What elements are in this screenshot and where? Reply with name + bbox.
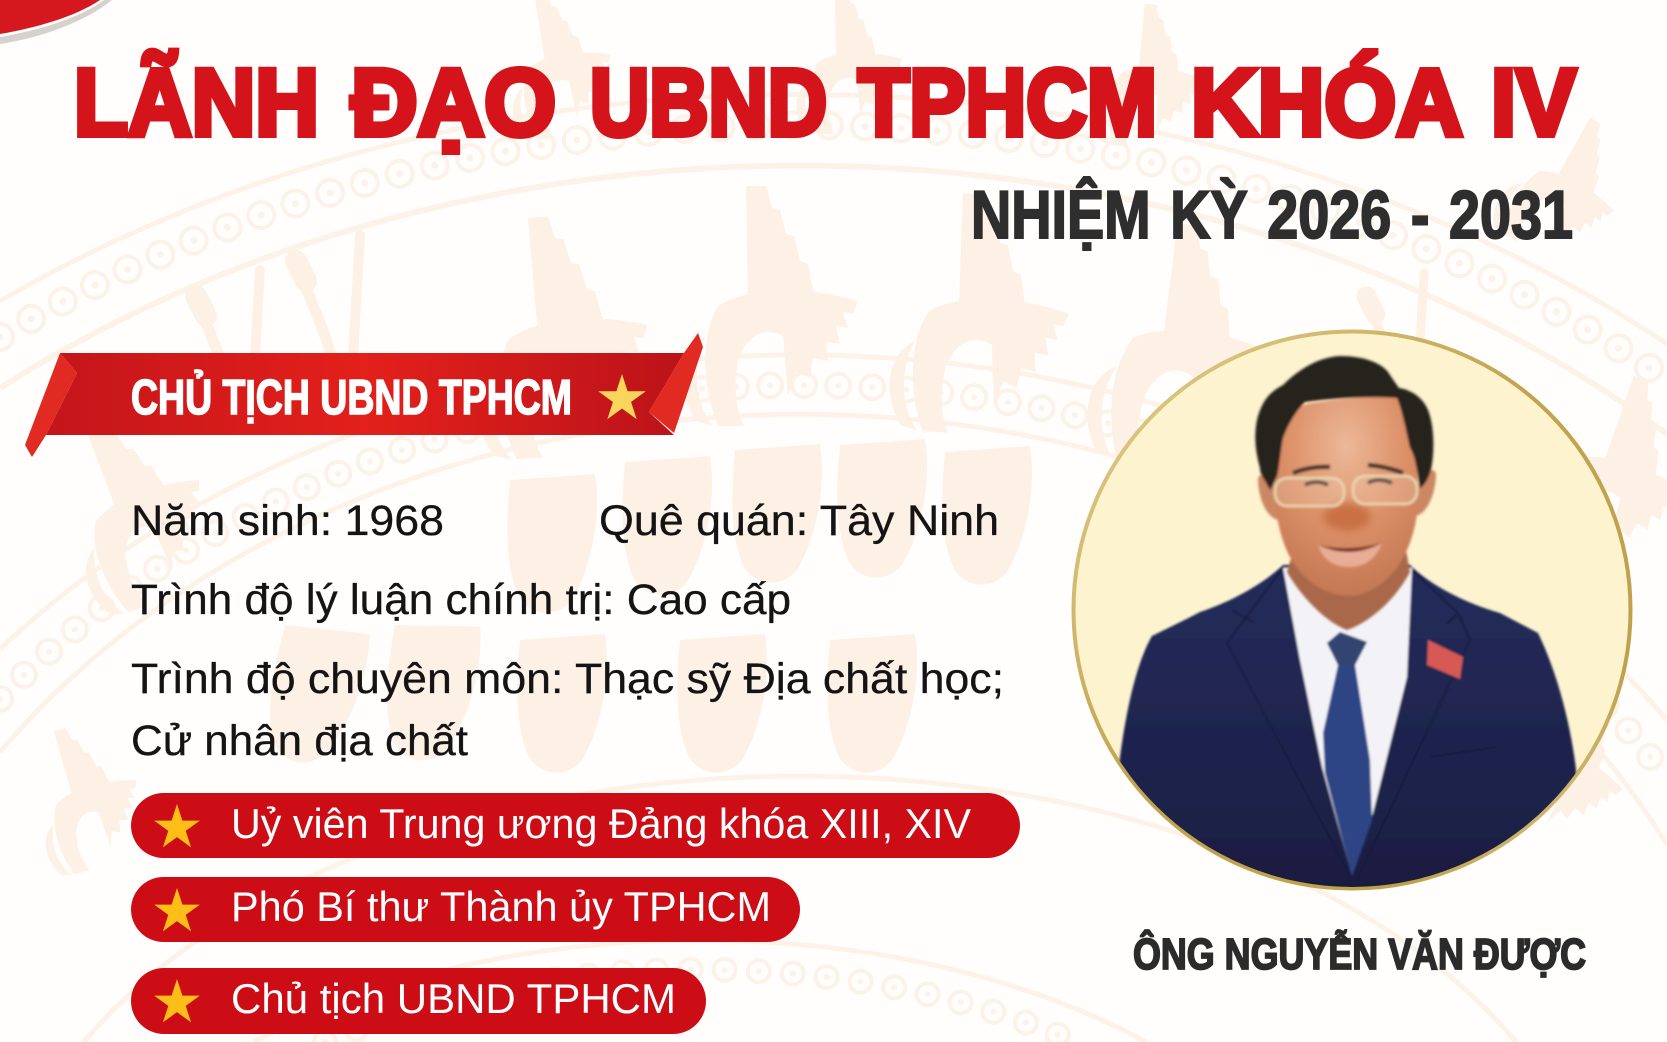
neck: [1287, 545, 1410, 630]
title: LÃNH: [74, 50, 319, 156]
corner flag: [0, 0, 112, 44]
biography text: [131, 497, 1004, 765]
portrait disc: [1074, 332, 1630, 888]
icon: ribbon star: [598, 374, 646, 419]
title: [74, 50, 1576, 156]
ribbon heading: [25, 333, 703, 457]
ribbon heading: CHỦ TỊCH UBND TPHCM: [131, 370, 572, 425]
title: IV: [1491, 50, 1576, 156]
tie: [1323, 632, 1372, 876]
pill: Chairman: Chủ tịch UBND TPHCM: [231, 975, 676, 1022]
nose shade: [1323, 503, 1371, 531]
biography text: Trình độ chuyên môn: Thạc sỹ Địa chất học;: [131, 655, 1004, 703]
biography text: Năm sinh: 1968: [131, 497, 444, 545]
title: UBND: [590, 50, 827, 156]
pill: Chairman: [131, 968, 706, 1034]
title: KHÓA: [1191, 50, 1463, 156]
eyes: [1305, 480, 1392, 485]
title: TPHCM: [858, 50, 1157, 156]
hair: [1255, 356, 1433, 490]
face: [1274, 397, 1418, 596]
biography text: Trình độ lý luận chính trị: Cao cấp: [131, 576, 791, 624]
biography text: Cử nhân địa chất: [131, 717, 468, 765]
smile: [1318, 543, 1382, 567]
suit: [1118, 565, 1576, 900]
biography text: Quê quán: Tây Ninh: [599, 497, 999, 545]
title: ĐẠO: [351, 50, 556, 156]
lapel lines: [1226, 568, 1486, 772]
flag pin: [1427, 640, 1463, 679]
pill: Central Committee: Uỷ viên Trung ương Đảng khóa XIII, XIV: [231, 800, 971, 847]
tie knot: [1327, 632, 1367, 665]
eyebrows: [1293, 465, 1403, 473]
shirt: [1283, 568, 1412, 875]
pill: Central Committee: [131, 793, 1020, 858]
pill: Deputy Secretary: [131, 877, 800, 942]
portrait: [1074, 332, 1630, 900]
pill: Deputy Secretary: Phó Bí thư Thành ủy TPHCM: [231, 883, 771, 930]
ears: [1258, 470, 1436, 520]
glasses: [1275, 476, 1417, 506]
